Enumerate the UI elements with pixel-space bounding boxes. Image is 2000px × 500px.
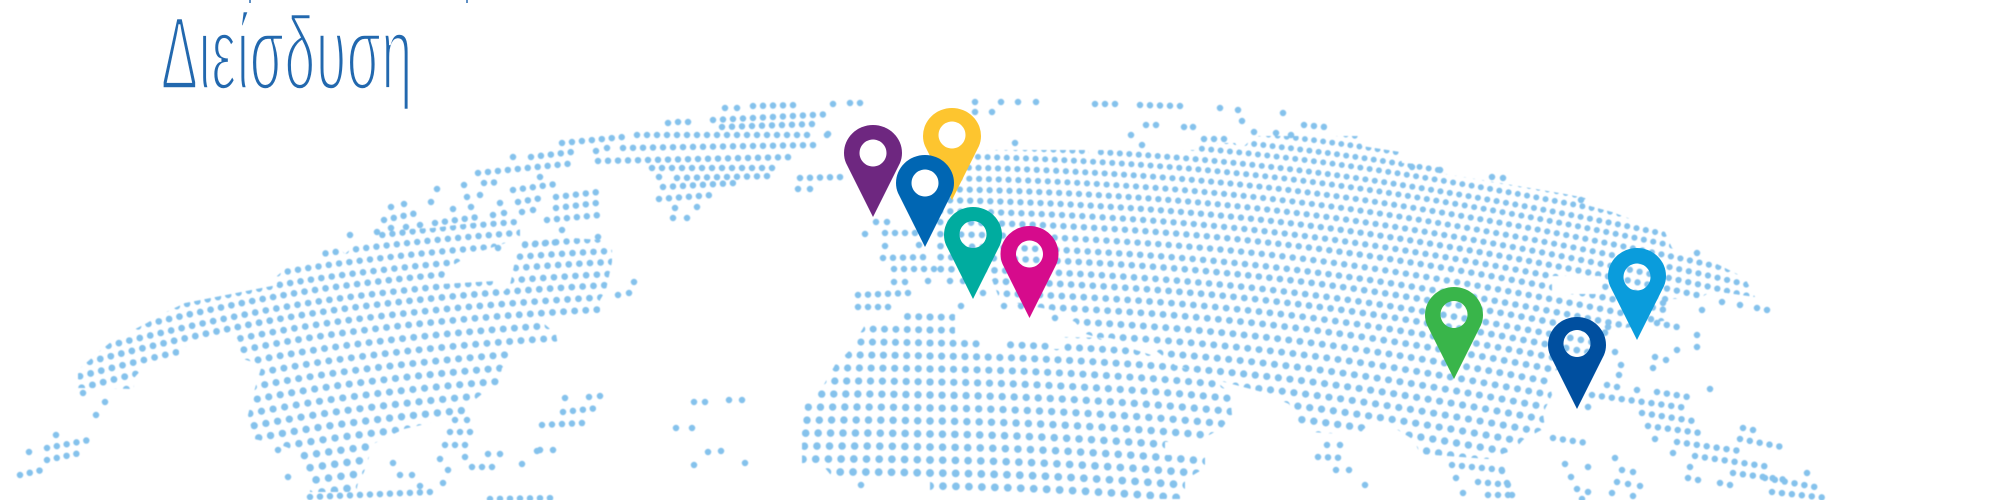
pin: magenta [1000,226,1058,318]
clipped line of text at top edge [249,0,468,3]
pin: teal [944,207,1002,299]
pin: blue [896,155,954,247]
pin: navy [1548,317,1606,409]
coastal fragments and islands: dotted runs [20,104,1827,499]
pin: purple [844,125,902,217]
dotted world map [0,92,1827,499]
scattered single dots [29,102,1807,499]
pin: light blue [1608,248,1666,340]
continents: curved rows of dots [77,135,1756,500]
pin: yellow [923,108,981,200]
pin: green [1425,287,1483,379]
map pins [844,108,1666,409]
